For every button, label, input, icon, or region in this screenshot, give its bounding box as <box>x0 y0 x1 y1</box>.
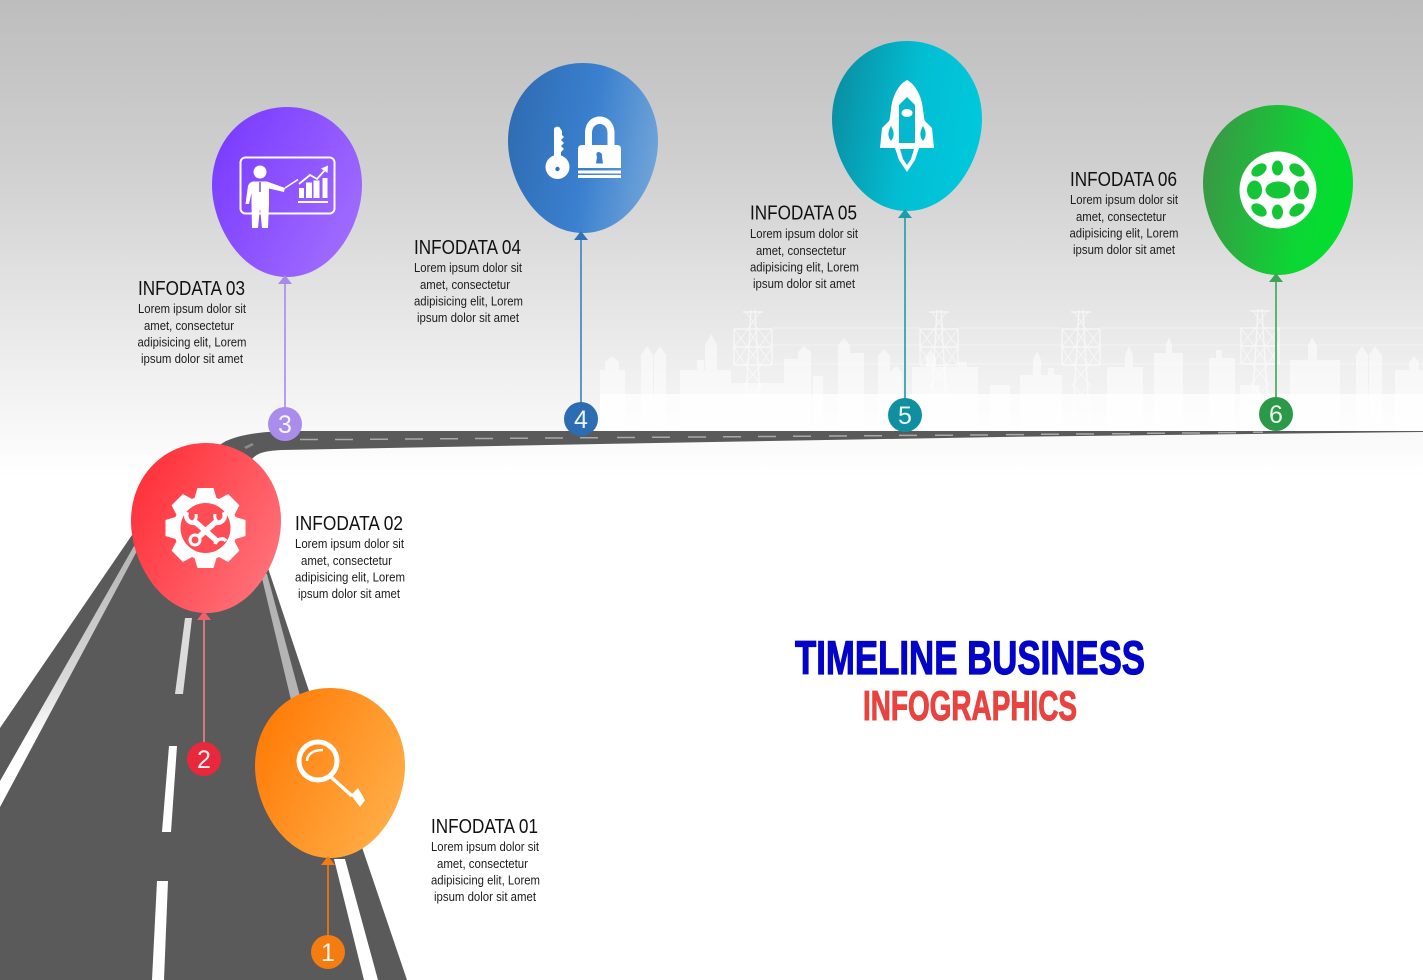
marker 4: 4 <box>574 406 588 434</box>
text: infodata 01: ipsum dolor sit amet <box>434 889 536 904</box>
marker 5 <box>888 398 922 432</box>
title: TIMELINE BUSINESS <box>795 631 1145 684</box>
marker 3 <box>268 407 302 441</box>
text: infodata 02: amet, consectetur <box>301 553 393 568</box>
text: infodata 05: adipisicing elit, Lorem <box>750 260 859 274</box>
text: infodata 01: INFODATA 01 <box>431 815 538 838</box>
marker 5: 5 <box>898 402 912 430</box>
text: infodata 05: amet, consectetur <box>756 243 847 258</box>
icon: presenter with chart <box>240 158 334 228</box>
icon: rocket <box>880 80 934 172</box>
left edge line <box>0 546 138 807</box>
icon: globe grid <box>1240 152 1316 228</box>
step 5: infodata 05 <box>750 41 982 432</box>
text: infodata 02: adipisicing elit, Lorem <box>295 570 405 584</box>
text: infodata 06: amet, consectetur <box>1076 209 1167 224</box>
right edge line upper <box>261 574 300 700</box>
subtitle: INFOGRAPHICS <box>863 682 1077 729</box>
city skyline silhouette <box>600 309 1423 431</box>
balloon 6 <box>1203 105 1353 282</box>
text: infodata 05: INFODATA 05 <box>750 202 857 224</box>
text: infodata 04: INFODATA 04 <box>414 236 521 259</box>
balloon 2 <box>131 443 281 620</box>
step 1: infodata 01 <box>255 688 540 969</box>
text: infodata 03 <box>138 277 247 366</box>
text: infodata 05: ipsum dolor sit amet <box>753 276 855 291</box>
title <box>795 631 1145 729</box>
text: infodata 06 <box>1070 168 1179 257</box>
balloon 5 <box>832 41 982 218</box>
marker 1: 1 <box>321 939 335 967</box>
balloon string 2 <box>203 615 205 745</box>
balloon string 5 <box>904 213 906 400</box>
text: infodata 04: adipisicing elit, Lorem <box>414 294 523 308</box>
text: infodata 01: adipisicing elit, Lorem <box>431 872 540 888</box>
marker 2: 2 <box>197 746 211 774</box>
text: infodata 04: Lorem ipsum dolor sit <box>414 260 522 275</box>
text: infodata 04: amet, consectetur <box>420 277 511 292</box>
text: infodata 02: Lorem ipsum dolor sit <box>295 536 404 551</box>
balloon string 3 <box>284 279 286 410</box>
text: infodata 06: ipsum dolor sit amet <box>1073 242 1175 257</box>
balloon string 1 <box>327 860 329 940</box>
text: infodata 06: Lorem ipsum dolor sit <box>1070 192 1178 207</box>
text: infodata 04: ipsum dolor sit amet <box>417 310 519 325</box>
marker 1 <box>311 935 345 969</box>
text: infodata 03: INFODATA 03 <box>138 277 245 300</box>
text: infodata 06: adipisicing elit, Lorem <box>1070 226 1179 240</box>
text: infodata 05: Lorem ipsum dolor sit <box>750 226 858 241</box>
marker 3: 3 <box>278 411 292 439</box>
marker 6: 6 <box>1269 401 1283 429</box>
step 3: infodata 03 <box>138 107 362 441</box>
marker 4 <box>564 402 598 436</box>
text: infodata 02: ipsum dolor sit amet <box>298 586 400 601</box>
text: infodata 03: amet, consectetur <box>144 318 235 333</box>
icon: gear with wrenches <box>166 488 246 568</box>
icon: key and padlock <box>546 116 621 179</box>
icon: magnifying glass <box>299 742 365 807</box>
balloon string 4 <box>580 235 582 405</box>
balloon 4 <box>508 63 658 240</box>
text: infodata 01 <box>431 815 540 904</box>
balloon string 6 <box>1275 277 1277 400</box>
winding road <box>0 431 1423 980</box>
sky gradient background <box>0 0 1423 480</box>
text: infodata 02 <box>295 512 405 601</box>
step 4: infodata 04 <box>414 63 658 436</box>
text: infodata 03: ipsum dolor sit amet <box>141 351 243 366</box>
step 6: infodata 06 <box>1070 105 1353 431</box>
text: infodata 03: Lorem ipsum dolor sit <box>138 301 246 316</box>
right edge line lower <box>334 859 378 980</box>
step 2: infodata 02 <box>131 443 405 776</box>
text: infodata 04 <box>414 236 523 325</box>
text: infodata 02: INFODATA 02 <box>295 512 403 535</box>
horizontal road dashes <box>300 432 1263 440</box>
text: infodata 03: adipisicing elit, Lorem <box>138 334 247 350</box>
text: infodata 05 <box>750 202 859 291</box>
centre dashes <box>152 443 254 980</box>
text: infodata 01: Lorem ipsum dolor sit <box>431 839 539 854</box>
text: infodata 06: INFODATA 06 <box>1070 168 1177 191</box>
balloon 3 <box>212 107 362 284</box>
text: infodata 01: amet, consectetur <box>437 856 529 871</box>
balloon 1 <box>255 688 405 865</box>
marker 2 <box>187 742 221 776</box>
marker 6 <box>1259 397 1293 431</box>
